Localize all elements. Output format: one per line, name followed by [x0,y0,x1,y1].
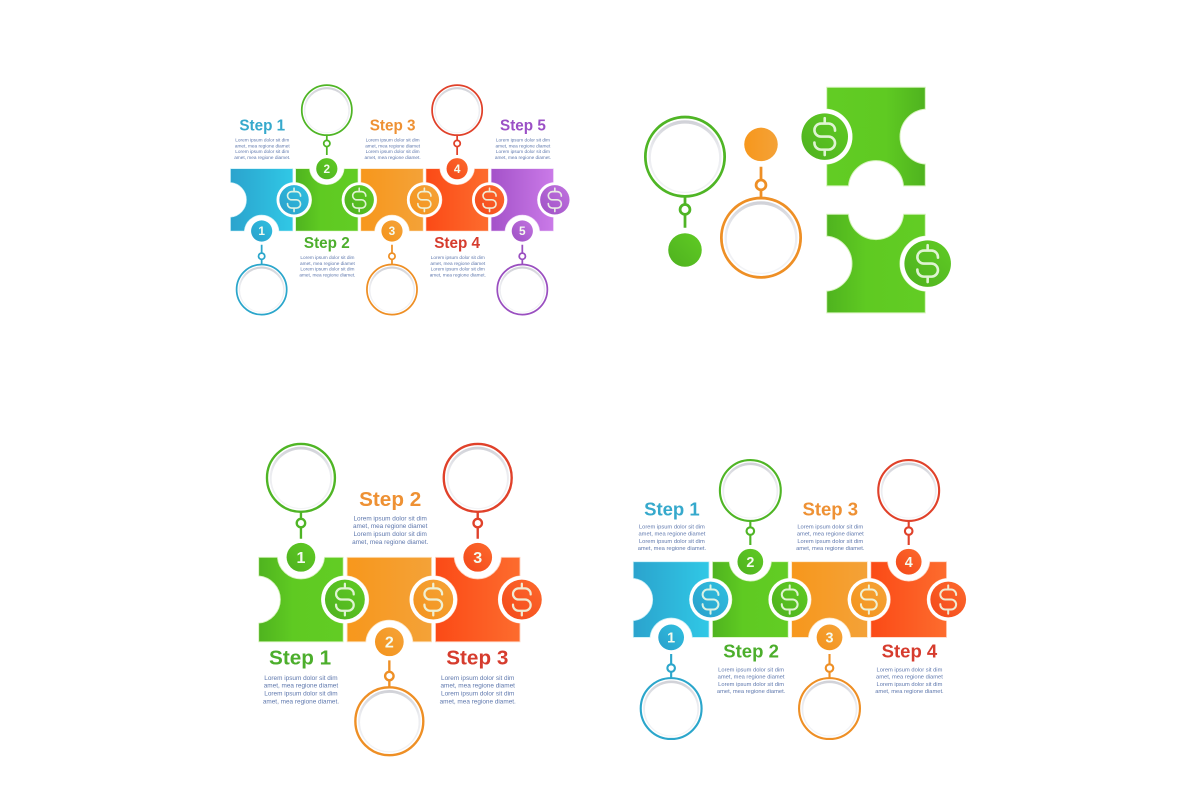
panel: four step puzzle infographic [633,460,969,739]
heading: step 3: Step 3 [370,118,415,135]
text block: step 5: amet, mea regione diamet. [495,155,551,161]
heading: step 3: Step 3 [446,646,508,669]
text block: step 2: amet, mea regione diamet [300,261,356,267]
text block: step 3: amet, mea regione diamet. [365,155,421,161]
icon: dollar coin red [498,576,545,623]
text block: step 2: Lorem ipsum dolor sit dim [354,515,427,522]
text block: step 2: Lorem ipsum dolor sit dim [354,531,427,538]
icon: dollar coin green [769,578,811,621]
text block: step 2: amet, mea regione diamet [718,675,785,681]
text block: step 3: Lorem ipsum dolor sit dim [366,149,420,155]
text block: step 3: Lorem ipsum dolor sit dim [441,691,514,698]
marker 2 with empty circle: 2 [385,634,394,652]
puzzle piece 3 orange [361,169,423,231]
puzzle piece 2 green [296,169,358,231]
text block: step 4: amet, mea regione diamet [876,675,943,681]
text block: step 3: Lorem ipsum dolor sit dim [366,138,420,144]
text block: step 1: Lorem ipsum dolor sit dim [235,149,289,155]
puzzle piece 1 green [259,557,343,642]
puzzle piece 4 red [426,169,488,231]
icon: dollar coin orange [407,182,442,217]
text block: step 5: Lorem ipsum dolor sit dim [496,149,550,155]
text block: step 1: Lorem ipsum dolor sit dim [264,675,338,682]
text block: step 2: amet, mea regione diamet [353,523,428,530]
icon: dollar coin purple [537,182,572,217]
panel: three step puzzle infographic [259,444,545,755]
heading: step 2: Step 2 [359,488,421,511]
marker 4 with empty circle: 4 [454,162,461,176]
text block: step 1: amet, mea regione diamet. [638,546,707,552]
text block: step 2: amet, mea regione diamet. [717,689,786,695]
marker 4 with empty circle [878,460,939,575]
text block: step 2: Lorem ipsum dolor sit dim [300,267,355,273]
marker 2 with empty circle [302,85,352,179]
marker 1 with empty circle [267,444,335,572]
marker 1 with empty circle: 1 [296,549,305,567]
icon: dollar coin orange [410,576,457,623]
text block: step 1: Lorem ipsum dolor sit dim [639,525,705,531]
icon: dollar coin red [472,182,507,217]
marker 3 with empty circle: 3 [389,224,396,238]
puzzle piece 5 purple [491,169,553,231]
puzzle piece 2 orange [347,557,432,642]
text block: step 2: amet, mea regione diamet. [352,539,429,546]
text block: step 2: Lorem ipsum dolor sit dim [718,668,784,674]
marker 5 with empty circle [497,220,547,315]
marker 3 with empty circle: 3 [826,631,834,647]
marker 3 with empty circle [444,444,512,572]
heading: step 4: Step 4 [882,641,938,662]
icon: dollar coin orange [848,578,890,621]
text block: step 1: amet, mea regione diamet [264,683,338,690]
text block: step 3: amet, mea regione diamet. [440,698,516,705]
empty circle with green dot [645,117,725,267]
heading: step 3: Step 3 [802,499,858,520]
marker 3 with empty circle: 3 [473,549,482,567]
marker 3 with empty circle [799,625,860,739]
text block: step 2: Lorem ipsum dolor sit dim [718,682,784,688]
marker 1 with empty circle: 1 [258,224,265,238]
empty circle with orange dot [721,128,801,277]
marker 2 with empty circle [720,460,781,575]
heading: step 2: Step 2 [723,641,779,662]
text block: step 4: Lorem ipsum dolor sit dim [431,255,485,261]
text block: step 1: amet, mea regione diamet [639,532,706,538]
text block: step 1: amet, mea regione diamet [235,143,290,149]
marker 4 with empty circle: 4 [905,555,913,571]
text block: step 4: Lorem ipsum dolor sit dim [877,668,943,674]
puzzle piece 3 red [435,557,520,642]
text block: step 3: Lorem ipsum dolor sit dim [797,539,863,545]
text block: step 4: amet, mea regione diamet. [875,689,944,695]
marker 4 with empty circle [432,85,482,179]
text block: step 3: amet, mea regione diamet [797,532,864,538]
text block: step 4: amet, mea regione diamet [430,261,486,267]
marker 2 with empty circle: 2 [746,555,754,571]
puzzle piece 3 orange [792,562,867,637]
heading: step 1: Step 1 [269,646,331,669]
heading: step 1: Step 1 [239,118,286,135]
text block: step 3: amet, mea regione diamet [441,683,515,690]
text block: step 5: amet, mea regione diamet [496,143,551,149]
icon: dollar coin blue [689,578,732,621]
panel: five step puzzle infographic [230,85,572,315]
marker 5 with empty circle: 5 [519,224,526,238]
text block: step 4: Lorem ipsum dolor sit dim [877,682,943,688]
text block: step 1: Lorem ipsum dolor sit dim [264,691,338,698]
icon: dollar coin green [321,576,369,623]
marker 2 with empty circle: 2 [324,162,331,176]
marker 3 with empty circle [367,220,417,315]
text block: step 3: Lorem ipsum dolor sit dim [441,675,514,682]
text block: step 2: amet, mea regione diamet. [299,272,356,278]
text block: step 1: amet, mea regione diamet. [263,698,339,705]
puzzle piece 4 red [871,562,947,637]
text block: step 1: amet, mea regione diamet. [234,155,290,161]
icon: dollar coin red [927,578,969,621]
green puzzle piece with bottom notch [797,87,925,186]
marker 1 with empty circle [237,220,287,315]
green puzzle piece with top notch [827,214,955,313]
text block: step 4: amet, mea regione diamet. [430,272,486,278]
text block: step 3: amet, mea regione diamet [365,143,421,149]
icon: dollar coin green [342,182,377,217]
text block: step 5: Lorem ipsum dolor sit dim [496,138,550,144]
heading: step 5: Step 5 [500,118,546,135]
puzzle piece 1 blue [633,562,709,637]
marker 1 with empty circle: 1 [667,631,675,647]
text block: step 3: amet, mea regione diamet. [796,546,865,552]
text block: step 2: Lorem ipsum dolor sit dim [300,255,355,261]
marker 2 with empty circle [355,627,423,755]
text block: step 1: Lorem ipsum dolor sit dim [235,138,289,144]
puzzle piece 1 blue [230,169,293,231]
text block: step 4: Lorem ipsum dolor sit dim [431,267,485,273]
text block: step 1: Lorem ipsum dolor sit dim [639,539,705,545]
puzzle piece 2 green [712,562,788,637]
marker 1 with empty circle [641,625,702,739]
panel: separate puzzle elements [645,87,955,313]
heading: step 4: Step 4 [434,235,481,252]
heading: step 1: Step 1 [644,499,700,520]
text block: step 3: Lorem ipsum dolor sit dim [797,525,863,531]
heading: step 2: Step 2 [304,235,350,252]
icon: dollar coin blue [277,182,311,217]
